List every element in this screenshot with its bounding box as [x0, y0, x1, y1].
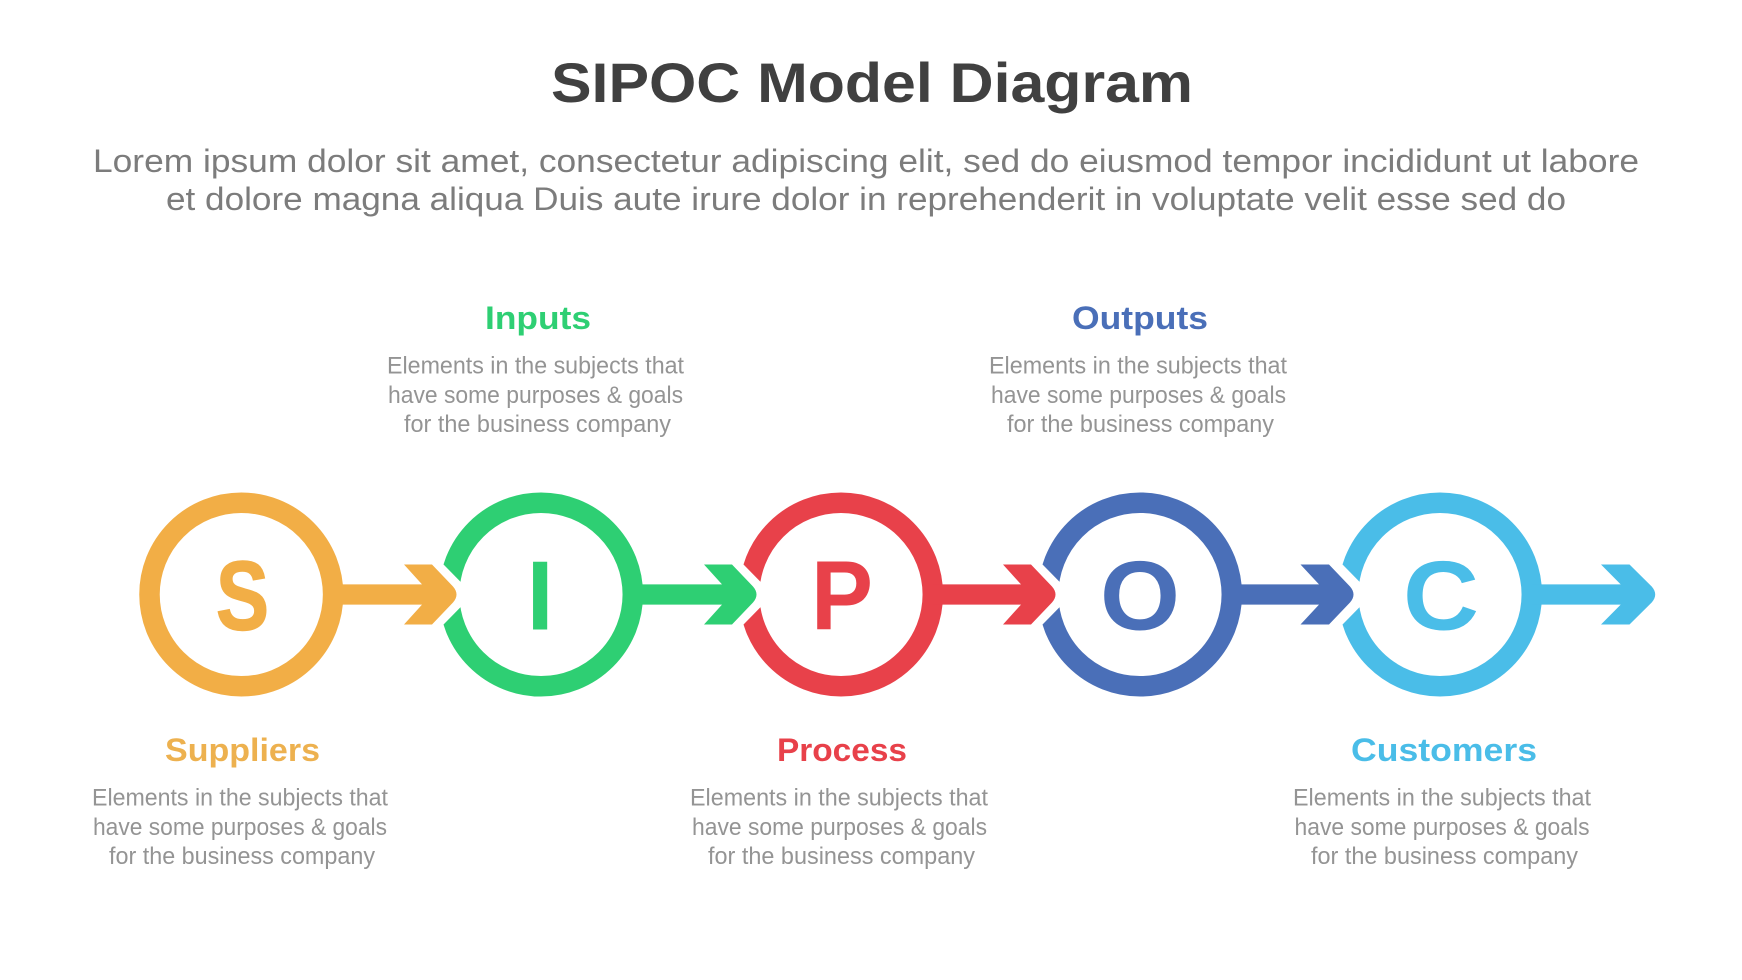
text block: customers: Elements in the subjects that — [1293, 784, 1591, 812]
text block: outputs: Elements in the subjects that — [989, 352, 1287, 380]
text block: suppliers: Elements in the subjects that — [92, 784, 388, 812]
circle: C — [1348, 503, 1532, 686]
text block: customers: for the business company — [1311, 843, 1578, 870]
arrow: outputs to customers — [1232, 540, 1372, 650]
text block: process: Process — [777, 732, 907, 768]
text block: outputs: Outputs — [1072, 300, 1208, 336]
arrow: inputs to process — [633, 540, 773, 650]
circle: S — [150, 503, 333, 686]
text block: inputs: Elements in the subjects that — [387, 352, 684, 380]
text block: suppliers — [92, 732, 388, 870]
text block: process — [690, 732, 988, 870]
text block: inputs: for the business company — [404, 411, 671, 438]
text block: inputs: Inputs — [485, 300, 591, 336]
text block: customers: have some purposes & goals — [1294, 814, 1590, 841]
text block: suppliers: Suppliers — [165, 732, 320, 768]
arrow: customers outgoing — [1532, 564, 1655, 624]
text block: inputs: have some purposes & goals — [388, 382, 683, 409]
circle: P: P — [811, 540, 873, 650]
text block: process: for the business company — [708, 843, 975, 870]
subtitle — [93, 143, 1639, 217]
text block: customers — [1293, 732, 1591, 870]
subtitle: et dolore magna aliqua Duis aute irure dolor in reprehenderit in voluptate velit esse sed do — [166, 181, 1566, 217]
text block: customers: Customers — [1351, 732, 1537, 768]
text block: suppliers: have some purposes & goals — [93, 814, 387, 841]
text block: inputs — [387, 300, 684, 438]
circle: I: I — [526, 540, 554, 650]
circle: O: O — [1100, 540, 1180, 650]
circle: S: S — [216, 540, 269, 650]
text block: outputs: have some purposes & goals — [991, 382, 1286, 409]
circle: I — [449, 503, 633, 686]
text block: outputs: for the business company — [1007, 411, 1274, 438]
text block: outputs — [989, 300, 1287, 438]
subtitle: Lorem ipsum dolor sit amet, consectetur adipiscing elit, sed do eiusmod tempor incididunt ut labore — [93, 143, 1639, 179]
text block: process: Elements in the subjects that — [690, 784, 988, 812]
arrow: process to outputs — [933, 540, 1072, 650]
title: SIPOC Model Diagram — [551, 51, 1193, 114]
text block: suppliers: for the business company — [109, 843, 375, 870]
circle: C: C — [1403, 540, 1479, 650]
circle: P — [749, 503, 933, 686]
arrow: suppliers to inputs — [333, 540, 473, 650]
text block: process: have some purposes & goals — [692, 814, 987, 841]
circle: O — [1048, 503, 1232, 686]
